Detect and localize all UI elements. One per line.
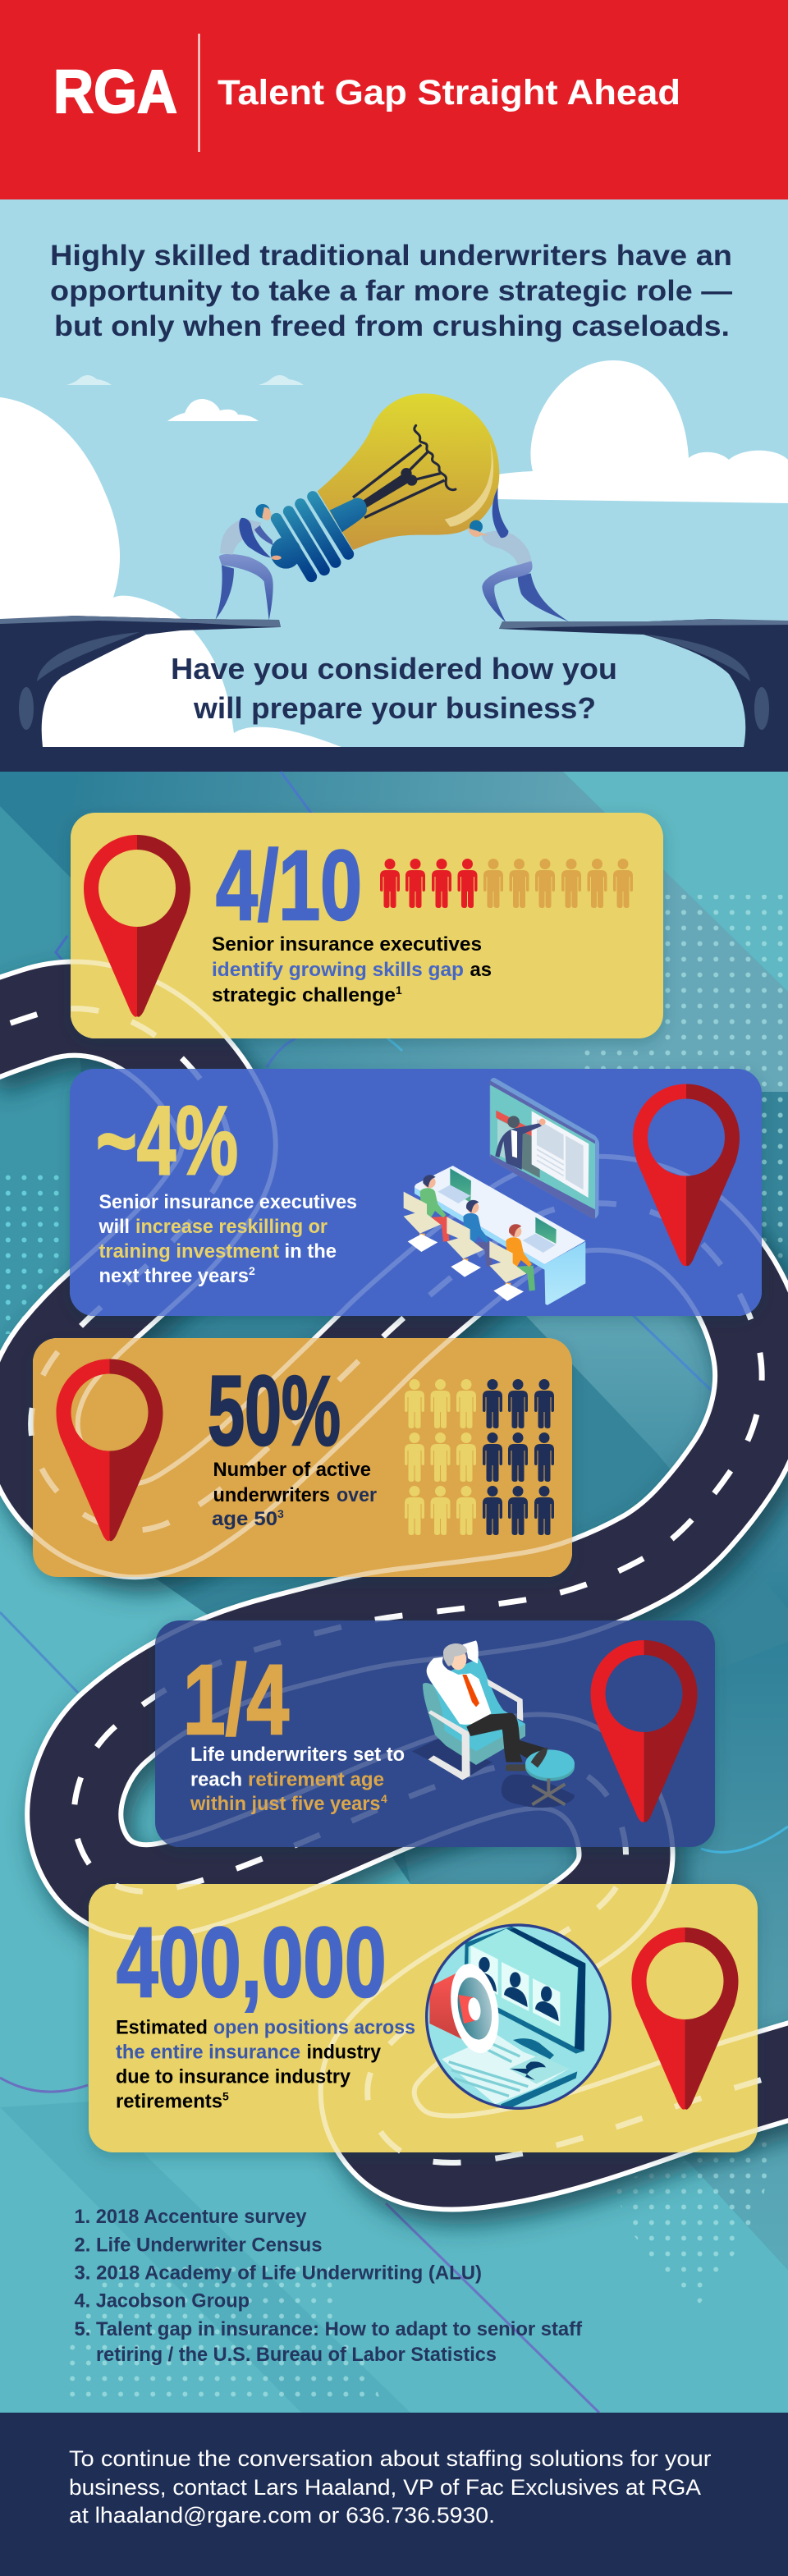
figure: person at right bbox=[468, 487, 569, 622]
text block: references: 5. Talent gap in insurance: How to adapt to senior staff bbox=[74, 2318, 583, 2340]
illustration: classroom training bbox=[404, 1078, 599, 1305]
panel: 1/4 stat bbox=[147, 1617, 718, 1860]
text block: contact details: business, contact Lars Haaland, VP of Fac Exclusives at RGA bbox=[69, 2475, 701, 2500]
figure: seated person 1 bbox=[404, 1175, 449, 1252]
text block: 2 bbox=[249, 1264, 255, 1277]
chart: 4 of 10 people pictogram bbox=[380, 859, 633, 908]
illustration: monitor with candidate photos bbox=[464, 1927, 585, 2054]
text block: Estimated bbox=[116, 2016, 208, 2039]
text block: Senior insurance executives bbox=[98, 1191, 357, 1213]
text block: increase reskilling or bbox=[135, 1216, 328, 1238]
dot patterns bbox=[0, 895, 788, 2405]
road: winding highway bbox=[0, 1009, 788, 2174]
heading: intro statement bbox=[50, 240, 732, 342]
illustration: megaphone bbox=[429, 1964, 499, 2053]
text block: 1 bbox=[396, 983, 402, 997]
illustration: footstool bbox=[525, 1747, 575, 1804]
icon: map pin bbox=[591, 1640, 698, 1822]
illustration: two people lifting a giant lightbulb bbox=[215, 393, 569, 622]
illustration: table bbox=[415, 1166, 585, 1305]
text block: as bbox=[470, 959, 492, 981]
panel: sky scene with lightbulb bbox=[0, 199, 788, 747]
icon: bulb screw base bbox=[271, 497, 367, 576]
text block: references: 2. Life Underwriter Census bbox=[74, 2235, 322, 2256]
figure: seated person 3 bbox=[489, 1224, 535, 1301]
heading: intro statement: Highly skilled traditional underwriters have an bbox=[50, 240, 732, 272]
text block: age 50 bbox=[212, 1508, 277, 1530]
icon: bulb glass bbox=[318, 393, 499, 550]
panel: ~4% stat bbox=[62, 1066, 770, 1329]
clouds bbox=[0, 360, 788, 747]
heading: intro statement: opportunity to take a far more strategic role — bbox=[50, 275, 732, 307]
illustration: presentation screen bbox=[490, 1078, 599, 1219]
text block: strategic challenge bbox=[212, 984, 396, 1006]
text block: 3 bbox=[277, 1507, 284, 1520]
illustration: relaxed man in chair bbox=[412, 1640, 575, 1808]
figure: man bbox=[427, 1640, 547, 1771]
text block: industry bbox=[307, 2041, 382, 2064]
icon: map pin bbox=[633, 1084, 740, 1266]
text block: 5 bbox=[222, 2090, 229, 2103]
heading: intro statement: but only when freed from crushing caseloads. bbox=[54, 310, 730, 342]
panel: 4/10 stat bbox=[62, 813, 668, 1052]
stat number: 50% bbox=[208, 1354, 341, 1466]
text block: next three years bbox=[98, 1265, 249, 1287]
text block: contact details: at lhaaland@rgare.com or 636.736.5930. bbox=[69, 2503, 495, 2528]
logo: RGA wordmark: RGA bbox=[53, 57, 177, 126]
title: Talent Gap Straight Ahead bbox=[218, 73, 680, 112]
text block: references: 3. 2018 Academy of Life Underwriting (ALU) bbox=[74, 2262, 482, 2284]
illustration: paper and desk items bbox=[442, 2034, 577, 2111]
icon: map pin bbox=[56, 1359, 163, 1541]
panel: 400,000 stat bbox=[80, 1881, 766, 2166]
illustration: armchair bbox=[423, 1658, 525, 1780]
figure: person at left bbox=[215, 504, 282, 621]
thin accent lines bbox=[0, 772, 788, 2413]
text block: due to insurance industry bbox=[116, 2065, 351, 2088]
panel: 50% stat bbox=[25, 1335, 580, 1590]
heading: question: Have you considered how you bbox=[171, 652, 617, 685]
chart: half of people pictogram bbox=[405, 1379, 554, 1535]
text block: contact details bbox=[69, 2446, 712, 2528]
text block bbox=[98, 1191, 357, 1287]
icon: filament bbox=[353, 425, 456, 518]
text block: Senior insurance executives bbox=[212, 933, 482, 956]
text block: references: 4. Jacobson Group bbox=[74, 2290, 250, 2312]
text block: will bbox=[98, 1216, 130, 1238]
stat number: ~4% bbox=[96, 1086, 238, 1195]
illustration: right cliff bbox=[499, 619, 788, 747]
text block: open positions across bbox=[213, 2016, 415, 2039]
panel: teal faceted background bbox=[0, 772, 788, 2413]
icon: map pin bbox=[84, 835, 190, 1017]
text block: underwriters bbox=[213, 1484, 330, 1506]
text block: contact details: To continue the conversation about staffing solutions for your bbox=[69, 2446, 712, 2471]
text block: retirements bbox=[116, 2090, 222, 2113]
heading: question bbox=[171, 652, 617, 725]
text block bbox=[212, 933, 492, 1006]
illustration: megaphone and job candidates in a circle bbox=[425, 1923, 612, 2110]
text block: reach bbox=[190, 1768, 242, 1791]
text block: over bbox=[337, 1484, 377, 1506]
illustration: left cliff bbox=[0, 616, 281, 747]
text block: in the bbox=[284, 1240, 337, 1263]
footer: contact call to action bbox=[0, 2413, 788, 2576]
icon: map pin bbox=[632, 1927, 739, 2110]
text block: references: 1. 2018 Accenture survey bbox=[74, 2206, 307, 2228]
header: red title banner bbox=[0, 0, 788, 199]
text block bbox=[116, 2016, 415, 2113]
text block: references: retiring / the U.S. Bureau of Labor Statistics bbox=[96, 2344, 497, 2366]
text block bbox=[212, 1459, 377, 1530]
text block: 4 bbox=[381, 1792, 387, 1805]
stat number: 400,000 bbox=[117, 1906, 386, 2018]
figure: seated person 2 bbox=[447, 1200, 492, 1277]
text block: references bbox=[74, 2206, 583, 2366]
text block: retirement age bbox=[248, 1768, 384, 1791]
panel: dark band under the sky bbox=[0, 747, 788, 772]
stat number: 4/10 bbox=[216, 829, 362, 941]
text block: Number of active bbox=[213, 1459, 371, 1481]
text block bbox=[190, 1744, 405, 1815]
text block: training investment bbox=[98, 1240, 279, 1263]
text block: the entire insurance bbox=[116, 2041, 300, 2064]
heading: question: will prepare your business? bbox=[193, 691, 596, 725]
stat number: 1/4 bbox=[183, 1643, 289, 1755]
text block: within just five years bbox=[190, 1793, 381, 1815]
text block: Life underwriters set to bbox=[190, 1744, 405, 1766]
text block: identify growing skills gap bbox=[212, 959, 464, 981]
